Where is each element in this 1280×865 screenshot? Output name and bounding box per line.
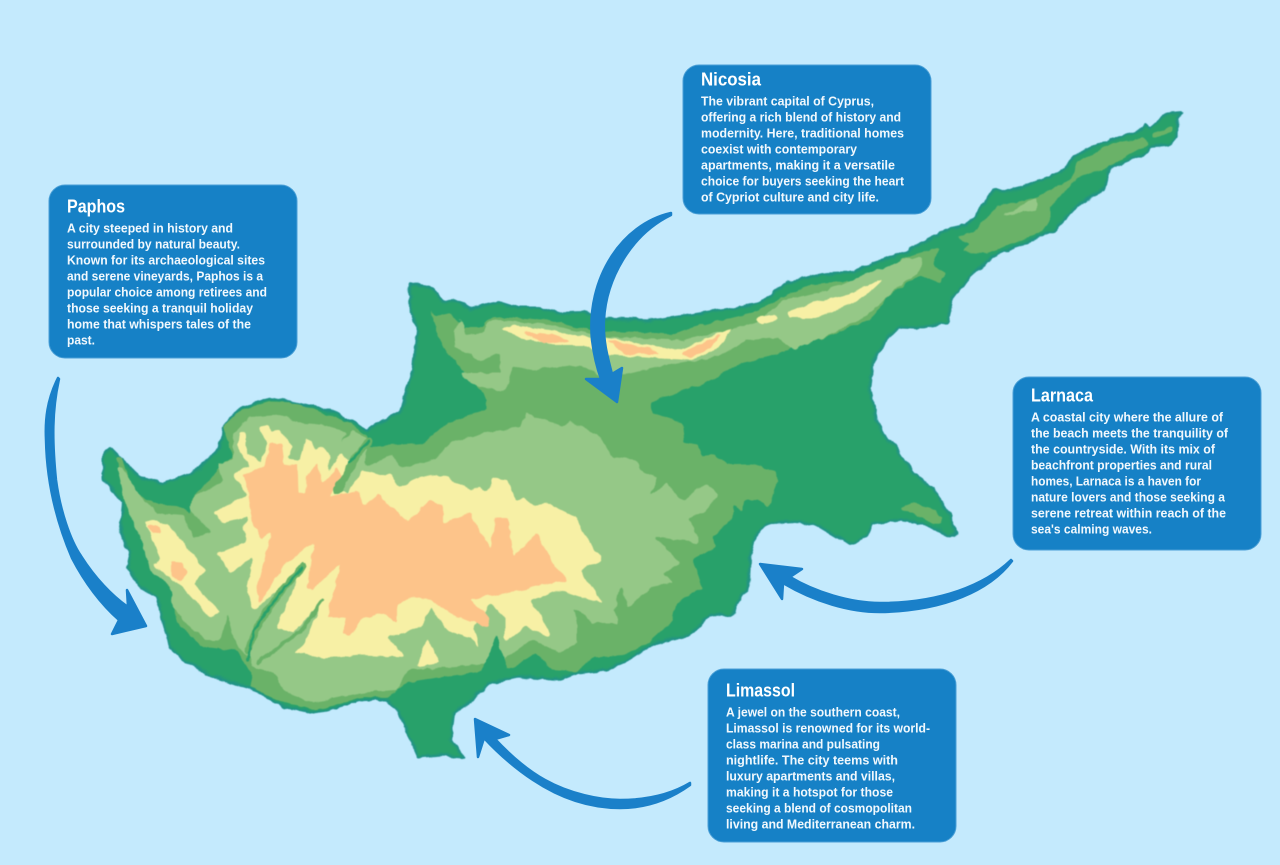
text block [1031,410,1229,536]
text block: apartments, making it a versatile [701,158,895,172]
panel background [683,65,931,214]
panel: Limassol [708,669,956,842]
orange zone: Troodos peak [242,443,567,637]
text block: coexist with contemporary [701,142,857,156]
valley: north Troodos stream, core [350,441,369,462]
valley: north Troodos stream, outer [338,441,369,490]
text block: serene retreat within reach of the [1031,506,1226,520]
panel background [1013,377,1261,550]
text block [726,706,930,832]
text block: class marina and pulsating [726,738,880,752]
text block: Limassol is renowned for its world- [726,722,930,736]
lowland inlet: south coast [480,633,507,674]
text block: luxury apartments and villas, [726,770,895,784]
arrow: Larnaca [760,560,1012,612]
text block: beachfront properties and rural [1031,458,1212,472]
panel background [49,185,297,358]
text block: Known for its archaeological sites [67,254,265,268]
heading: Limassol [726,680,795,700]
text block: A city steeped in history and [67,222,233,236]
text block: A coastal city where the allure of [1031,410,1224,424]
text block: offering a rich blend of history and [701,110,901,124]
yellow zone: Kyrenia ridge west [500,325,733,360]
light green zone: Kyrenia range [452,258,923,392]
mid-elevation zone: Karpas peninsula [955,138,1150,253]
text block: A jewel on the southern coast, [726,706,900,720]
heading: Larnaca [1031,386,1094,406]
text block: the countryside. With its mix of [1031,442,1216,456]
yellow zone: southern knoll [417,638,439,667]
yellow zone: Kyrenia ridge small [755,315,778,324]
valley: Paphos stream, core [248,568,302,660]
orange strip: Kyrenia centre [605,340,662,354]
text block: making it a hotspot for those [726,786,893,800]
valley: southern stream [258,600,323,662]
text block: past. [67,334,95,348]
text block: modernity. Here, traditional homes [701,126,904,140]
text block: the beach meets the tranquility of [1031,426,1229,440]
text block: those seeking a tranquil holiday [67,302,253,316]
arrow: Limassol [475,719,690,808]
mid-elevation zone: south-east cape [900,503,942,525]
light green zone: Karpas highlands [1000,197,1037,217]
panel: Larnaca [1013,377,1261,550]
light green zone: Troodos and central plain [117,413,718,703]
text block [67,222,267,348]
yellow zone: Kyrenia ridge east [787,278,885,318]
text block: and serene vineyards, Paphos is a [67,270,264,284]
text block: sea's calming waves. [1031,522,1152,536]
coastline: lowland base [103,112,1183,758]
yellow zone: Troodos foothills [213,425,603,658]
orange strip: Kyrenia west [520,331,572,344]
text block: surrounded by natural beauty. [67,238,240,252]
text block: living and Mediterranean charm. [726,818,915,832]
text block: The vibrant capital of Cyprus, [701,94,874,108]
text block: of Cypriot culture and city life. [701,190,879,204]
heading: Nicosia [701,70,762,90]
panel background [708,669,956,842]
orange spot: Akamas north [147,524,162,534]
heading: Paphos [67,196,125,216]
text block: choice for buyers seeking the heart [701,174,905,188]
valley: Paphos stream, outer [248,567,303,650]
text block: nightlife. The city teems with [726,754,898,768]
orange strip: Kyrenia east [680,334,722,358]
mid-elevation zone: main island [115,247,947,710]
arrow: Paphos [46,378,146,634]
text block: seeking a blend of cosmopolitan [726,802,912,816]
text block: popular choice among retirees and [67,286,267,300]
arrow: Nicosia [586,213,671,402]
orange spot: Akamas south [171,561,188,582]
text block [701,94,905,204]
panel: Paphos [49,185,297,358]
yellow zone: Akamas hills [145,520,220,617]
text block: nature lovers and those seeking a [1031,490,1226,504]
mid-elevation zone: Karpas tip [1152,125,1172,138]
panel: Nicosia [683,65,931,214]
map of Cyprus [103,112,1183,758]
text block: home that whispers tales of the [67,318,251,332]
text block: homes, Larnaca is a haven for [1031,474,1201,488]
